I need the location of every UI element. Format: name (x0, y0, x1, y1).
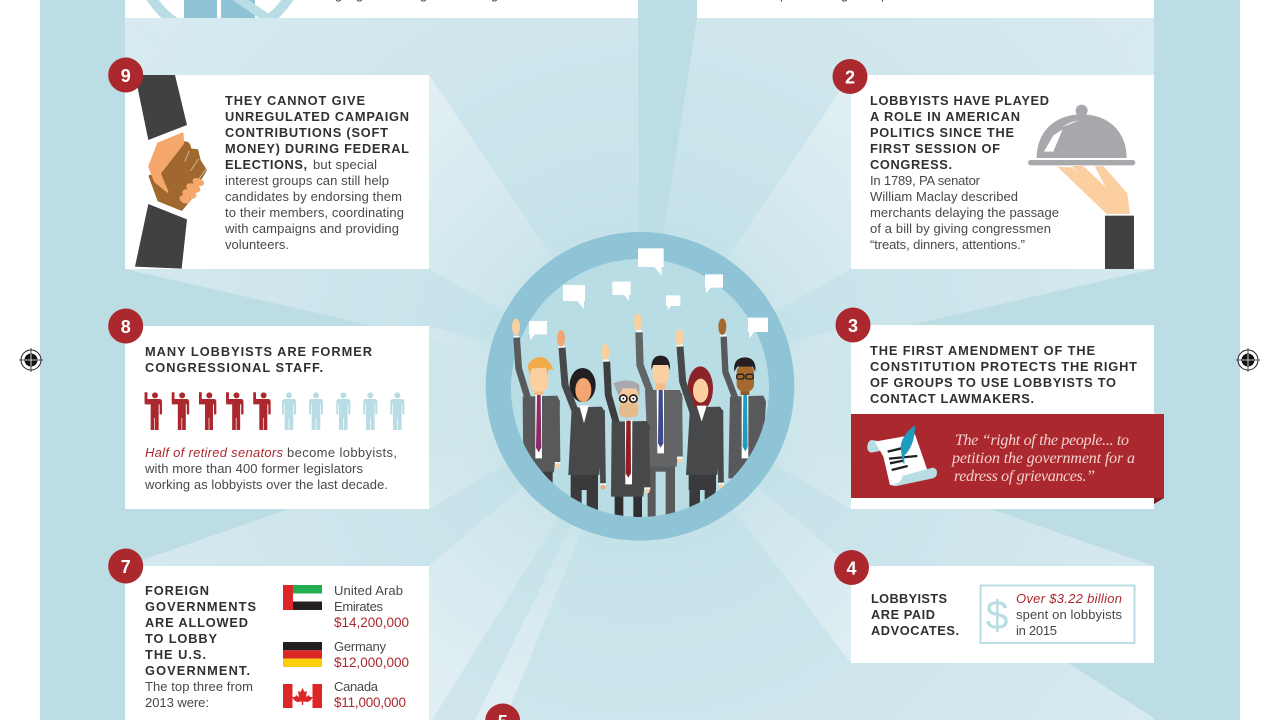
text block: become lobbyists, (287, 445, 397, 460)
panel: top right card fragment (697, 0, 1154, 18)
text block: A ROLE IN AMERICAN (870, 109, 1020, 124)
UAE amount: $14,200,000 (334, 615, 409, 630)
text block: merchants delaying the passage (870, 205, 1059, 220)
panel: 2 history (851, 75, 1154, 269)
Canada amount: Canada (334, 679, 379, 694)
text block: FOREIGN (145, 583, 209, 598)
heading: CONGRESSIONAL STAFF. (145, 360, 323, 375)
text block: ELECTIONS, (225, 157, 307, 172)
number badge 3: 3 (848, 316, 858, 336)
text block: UNREGULATED CAMPAIGN (225, 109, 409, 124)
person 4 back blue tie (634, 313, 683, 522)
quote: The “right of the people... to (955, 432, 1129, 449)
number badge 8: 8 (121, 317, 131, 337)
heading: LOBBYISTS (871, 591, 947, 606)
panel: 9 campaign contributions (125, 75, 429, 269)
inner disc (511, 259, 769, 517)
text fragment (335, 0, 498, 2)
icon: dollar sign: $ (986, 592, 1009, 638)
person 3 older man glasses (601, 344, 650, 518)
text block: GOVERNMENTS (145, 599, 256, 614)
text block: with more than 400 former legislators (144, 461, 364, 476)
stat box: spent on lobbyists (1016, 607, 1122, 622)
stat box: in 2015 (1016, 623, 1057, 638)
text block: CONGRESS. (870, 157, 952, 172)
icon: scroll and quill (867, 425, 937, 486)
stat box (980, 586, 1134, 643)
UAE amount: United Arab (334, 583, 403, 598)
quote (951, 432, 1135, 485)
icon: serving cloche (1028, 105, 1135, 269)
person 6 man teal tie (718, 318, 766, 478)
panel: 3 first amendment (851, 325, 1164, 509)
Germany amount: $12,000,000 (334, 655, 409, 670)
speech bubbles (529, 248, 768, 340)
text block: TO LOBBY (145, 631, 217, 646)
number badge 7 (108, 548, 143, 584)
number badge 8 (108, 308, 143, 344)
text block: but special (313, 157, 377, 172)
icon: UAE flag (283, 585, 322, 610)
text block: 2013 were: (145, 695, 209, 710)
heading: CONTACT LAWMAKERS. (870, 391, 1034, 406)
person 2 woman black hair (557, 330, 606, 515)
text block: working as lobbyists over the last decade. (144, 477, 388, 492)
number badge 2 (832, 59, 868, 94)
panel: 8 former staff (125, 326, 429, 509)
text block: of a bill by giving congressmen (870, 221, 1051, 236)
heading: MANY LOBBYISTS ARE FORMER (145, 344, 372, 359)
number badge 9 (108, 58, 143, 92)
text block: to their members, coordinating (225, 205, 404, 220)
quote: redress of grievances.” (954, 468, 1095, 485)
Germany amount (334, 639, 409, 670)
background rays (125, 18, 1154, 720)
UAE amount (334, 583, 409, 630)
text block: The top three from (145, 679, 253, 694)
central illustration (486, 232, 794, 541)
text block: William Maclay described (870, 189, 1018, 204)
person 1 purple tie (512, 319, 560, 485)
text block: with campaigns and providing (224, 221, 399, 236)
text block: volunteers. (225, 237, 289, 252)
number badge 2: 2 (845, 68, 855, 88)
panel: top left card fragment (125, 0, 638, 18)
ring (486, 232, 794, 541)
icon: Canada flag (283, 684, 322, 708)
panel: 4 paid advocates (851, 566, 1154, 663)
text block: POLITICS SINCE THE (870, 125, 1014, 140)
Germany amount: Germany (334, 639, 386, 654)
text block: THE U.S. (145, 647, 206, 662)
text block: FIRST SESSION OF (870, 141, 1000, 156)
stat box: Over $3.22 billion (1016, 591, 1122, 606)
heading: CONSTITUTION PROTECTS THE RIGHT (870, 359, 1137, 374)
number badge 9: 9 (121, 66, 131, 86)
icon: clasped hands (135, 75, 206, 269)
text block: ARE ALLOWED (145, 615, 248, 630)
number badge 4 (834, 550, 869, 585)
text block (224, 93, 409, 252)
text block: CONTRIBUTIONS (SOFT (225, 125, 388, 140)
Canada amount: $11,000,000 (334, 695, 406, 710)
quote: petition the government for a (951, 450, 1135, 467)
text block: interest groups can still help (225, 173, 389, 188)
text block (144, 445, 397, 492)
panel: 7 foreign governments (125, 566, 429, 720)
icon: Germany flag (283, 642, 322, 667)
text block: LOBBYISTS HAVE PLAYED (870, 93, 1049, 108)
number badge 5 (485, 704, 520, 720)
heading (870, 343, 1137, 406)
red quote banner (851, 414, 1164, 504)
text block: candidates by endorsing them (225, 189, 402, 204)
text block: “treats, dinners, attentions.” (870, 237, 1025, 252)
UAE amount: Emirates (334, 599, 384, 614)
registration mark right (1236, 348, 1260, 372)
heading: ARE PAID (871, 607, 935, 622)
text block: Half of retired senators (145, 445, 284, 460)
registration mark left (19, 348, 43, 372)
number badge 4: 4 (846, 558, 857, 578)
heading: OF GROUPS TO USE LOBBYISTS TO (870, 375, 1116, 390)
text block: In 1789, PA senator (870, 173, 981, 188)
heading (145, 344, 372, 375)
text block: GOVERNMENT. (145, 663, 250, 678)
text block (145, 583, 256, 710)
icon: crossed building (146, 0, 294, 18)
heading: ADVOCATES. (871, 623, 959, 638)
business people (512, 313, 766, 522)
number badge 3 (836, 308, 870, 342)
Canada amount (334, 679, 406, 710)
pictogram: ten figures (145, 392, 404, 430)
heading (871, 591, 959, 638)
text block: THEY CANNOT GIVE (225, 93, 365, 108)
text fragment (780, 0, 888, 2)
person 5 woman red hair (675, 329, 724, 512)
text block: MONEY) DURING FEDERAL (225, 141, 409, 156)
heading: THE FIRST AMENDMENT OF THE (870, 343, 1095, 358)
text block (870, 93, 1059, 252)
number badge 7: 7 (121, 557, 131, 577)
